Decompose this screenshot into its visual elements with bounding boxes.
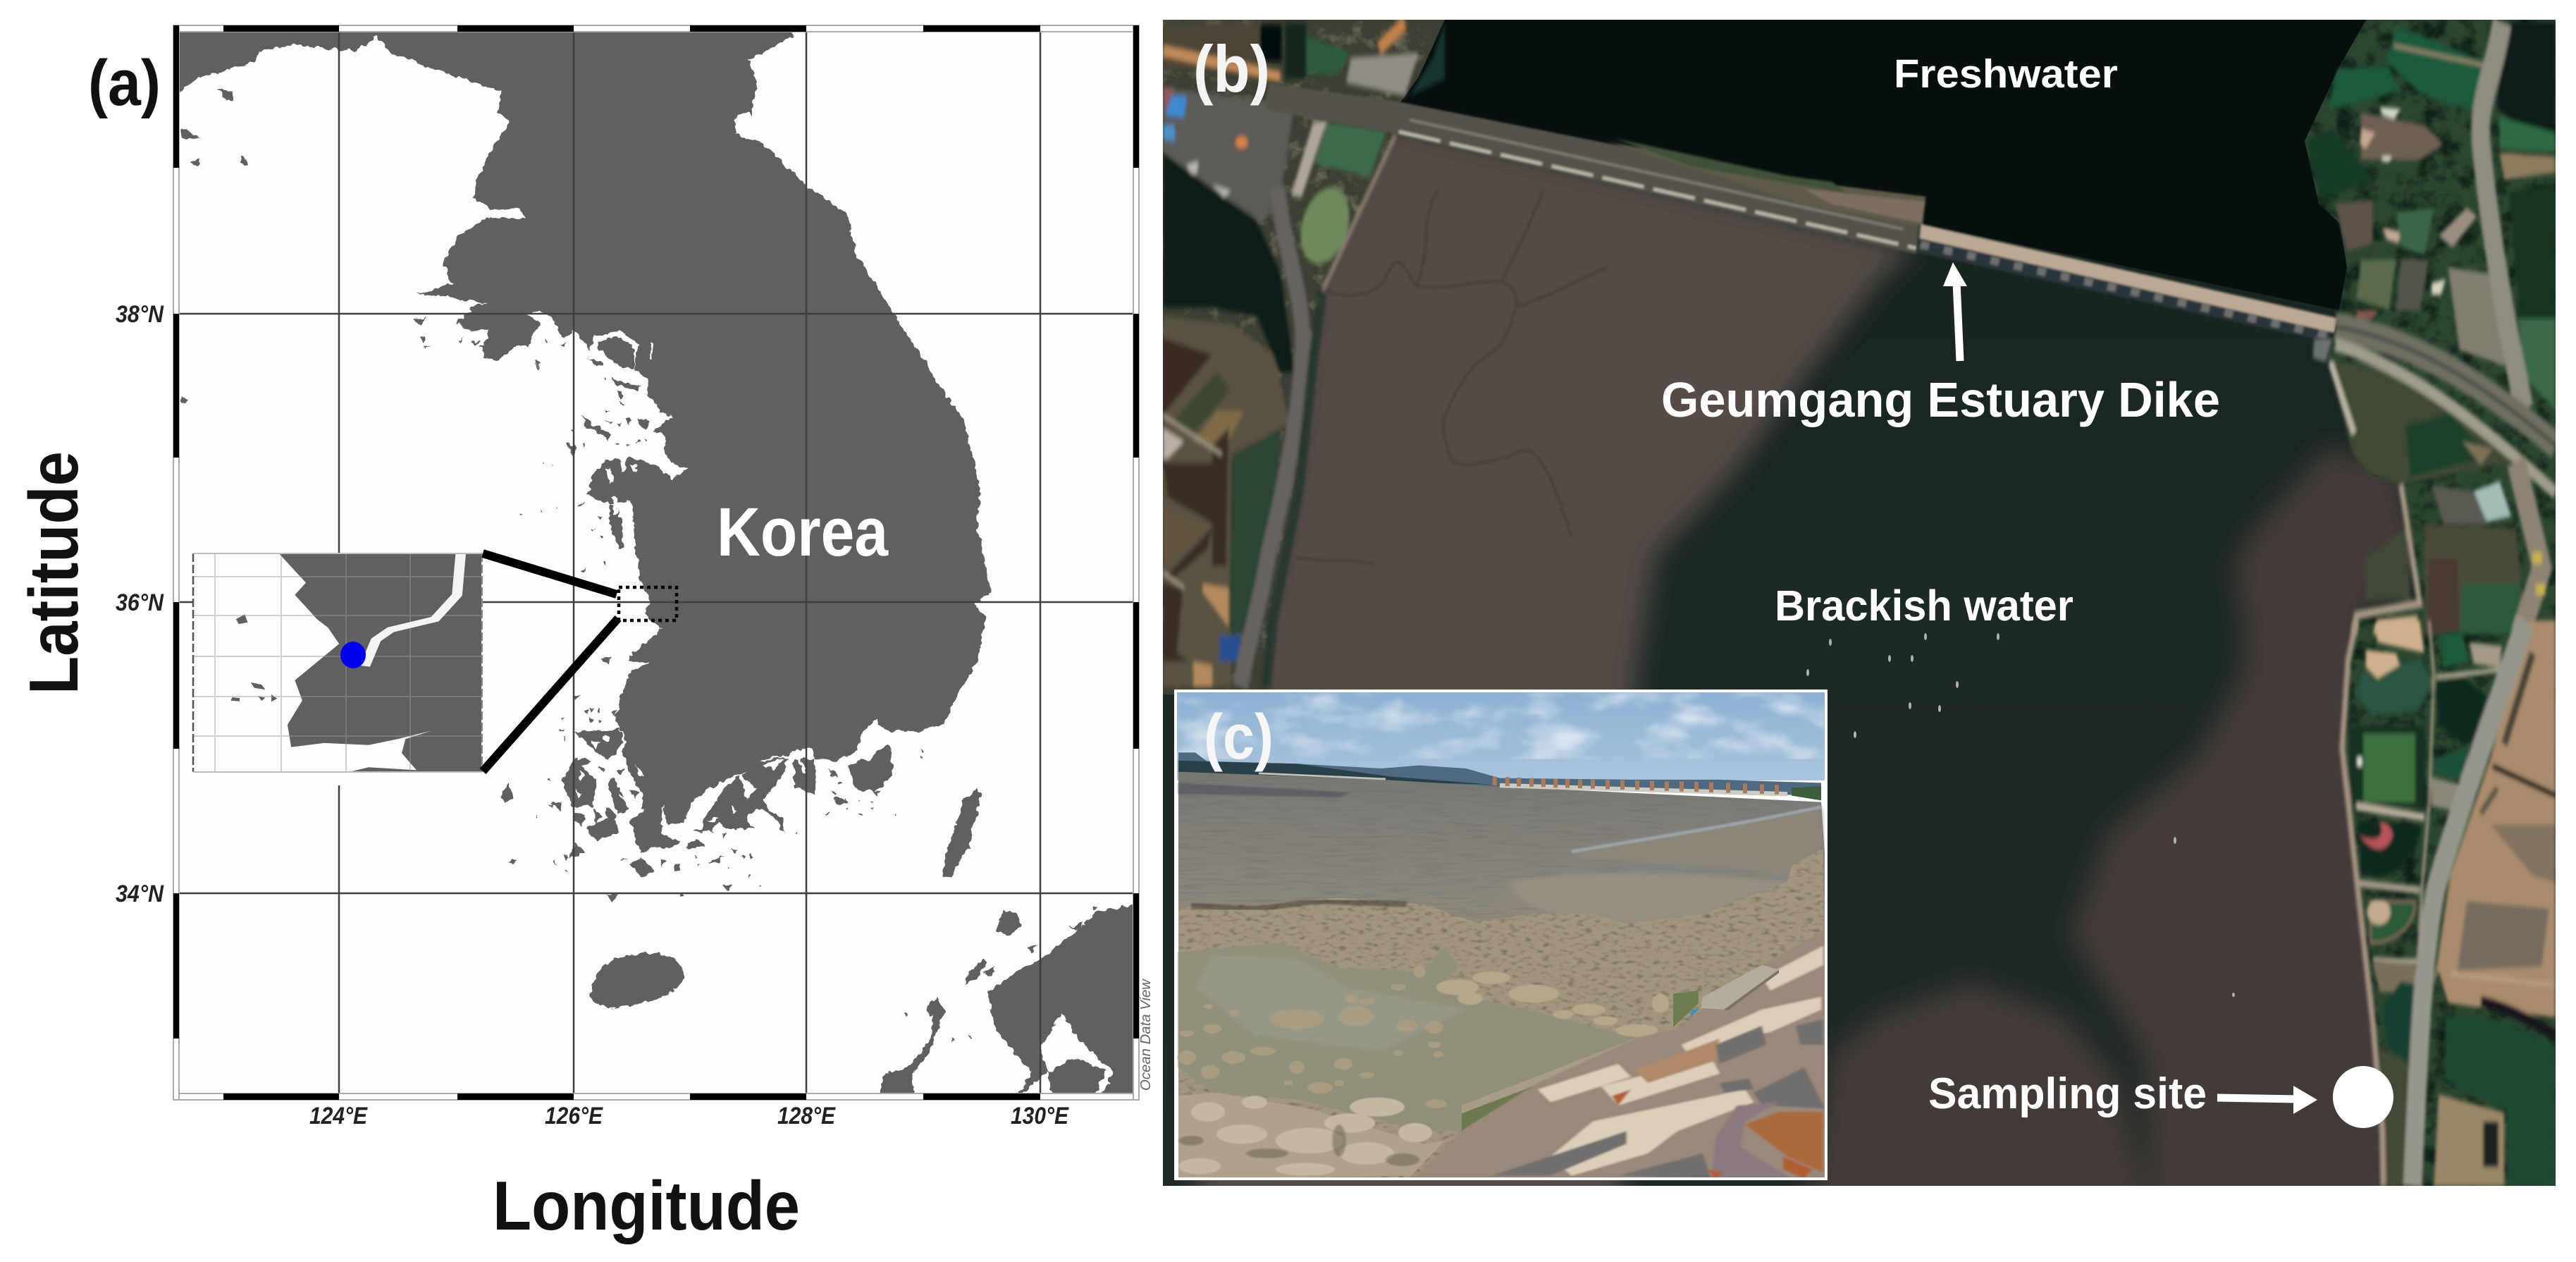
west land bank xyxy=(1163,20,1445,694)
forest strip xyxy=(2382,981,2417,1065)
map background xyxy=(173,25,1139,1100)
callout lines to inset xyxy=(483,553,618,771)
brackish water base xyxy=(1163,59,2420,1186)
rocks in pool xyxy=(1178,965,1447,1108)
latitude tick labels xyxy=(116,301,164,907)
lower east bank details xyxy=(2342,620,2556,1186)
rock band xyxy=(1178,848,1828,1182)
east land bank xyxy=(2305,20,2556,1186)
sand field xyxy=(2366,620,2424,679)
grid lines xyxy=(173,32,1139,1094)
latitude tick labels: 38°N xyxy=(116,301,164,328)
causeway road xyxy=(1265,83,1925,254)
pier xyxy=(2313,338,2333,362)
panel: site photo (c) xyxy=(1174,690,1828,1182)
mudflat water xyxy=(1178,772,1825,939)
latitude tick labels: 36°N xyxy=(116,589,164,616)
dashed study-area box xyxy=(619,587,677,620)
label: Korea: Korea xyxy=(717,494,889,570)
sky xyxy=(1177,692,1825,780)
lower right lots xyxy=(2424,525,2525,635)
pale sand flats xyxy=(1508,873,1792,924)
small boats xyxy=(1806,633,2235,997)
inset blank band under map inset xyxy=(193,768,486,785)
ocean data view credit: Ocean Data View xyxy=(1138,978,1154,1091)
concrete ledge xyxy=(1462,1039,1635,1113)
tidal creek channels xyxy=(1297,190,1607,564)
distant hills xyxy=(1178,752,1821,796)
clouds xyxy=(1177,692,1825,759)
latitude tick labels: 34°N xyxy=(116,881,164,907)
arrow to sampling site xyxy=(2217,1086,2317,1114)
west coast road xyxy=(1240,187,1302,687)
lower ball field xyxy=(2370,901,2415,943)
longitude tick labels: 128°E xyxy=(777,1103,836,1129)
axis title: Longitude: Longitude xyxy=(493,1167,800,1244)
label: Geumgang Estuary Dike: Geumgang Estuary Dike xyxy=(1661,372,2220,427)
freshwater xyxy=(1400,14,2372,310)
highway xyxy=(2335,326,2556,445)
side road xyxy=(2516,461,2542,635)
main road xyxy=(2412,620,2525,1186)
mudflat and turbid plumes xyxy=(1198,120,2424,1213)
longitude tick labels: 130°E xyxy=(1011,1103,1069,1129)
sports fields xyxy=(1316,122,1386,178)
land masses xyxy=(162,21,1150,1101)
baseball field xyxy=(2359,821,2421,877)
label: Brackish water: Brackish water xyxy=(1775,582,2073,630)
Japan, Jeju, Tsushima (map coordinates) xyxy=(180,71,1150,1101)
inset map xyxy=(193,553,482,773)
concrete stairs xyxy=(1701,965,1779,1010)
soccer field xyxy=(2349,726,2424,807)
sand east of road xyxy=(2434,620,2556,1018)
town xyxy=(1163,87,1295,221)
panel label (a): (a) xyxy=(88,47,161,119)
farmland xyxy=(1163,316,1290,687)
shore strip xyxy=(2342,620,2384,1186)
label: panel (b): (b) xyxy=(1193,32,1270,106)
tidal pool xyxy=(1178,943,1635,1131)
mid west coast islands xyxy=(412,317,652,573)
axis title: Latitude: Latitude xyxy=(15,451,92,694)
rock pile mid xyxy=(1436,972,1669,1037)
icon: blue sampling dot xyxy=(340,642,366,668)
upper east bank details xyxy=(2307,22,2556,635)
panel: satellite view (b) xyxy=(1163,14,2556,1213)
forest SE xyxy=(2444,1016,2556,1186)
arrow to dike xyxy=(1943,262,1967,361)
Geumgang estuary dike bridge xyxy=(1917,224,2340,341)
foreground rocks xyxy=(1178,1093,1445,1179)
longitude tick labels: 124°E xyxy=(309,1103,368,1129)
label: panel (c): (c) xyxy=(1204,702,1274,773)
tree strip xyxy=(1228,429,1281,635)
dike in distance xyxy=(1495,776,1787,795)
forest xyxy=(1163,152,1295,372)
longitude tick labels: 126°E xyxy=(545,1103,603,1129)
N-S road xyxy=(2481,22,2525,410)
icon: sampling site marker xyxy=(2333,1066,2393,1128)
label: Sampling site: Sampling site xyxy=(1928,1070,2207,1118)
distant road xyxy=(1259,773,1386,779)
photo scene in crop coordinates xyxy=(1178,752,1828,1182)
park below highway xyxy=(2328,358,2514,485)
label: Freshwater: Freshwater xyxy=(1894,51,2118,97)
trees xyxy=(2436,675,2490,745)
rip-rap bank xyxy=(1411,930,1825,1180)
round green field xyxy=(2354,658,2434,715)
frame scale bars xyxy=(173,25,1139,1100)
fields top-left xyxy=(1163,23,1259,71)
panel: map of Korea (a) xyxy=(15,21,1154,1244)
south coast islands xyxy=(500,656,982,902)
longitude tick labels xyxy=(309,1103,1069,1129)
